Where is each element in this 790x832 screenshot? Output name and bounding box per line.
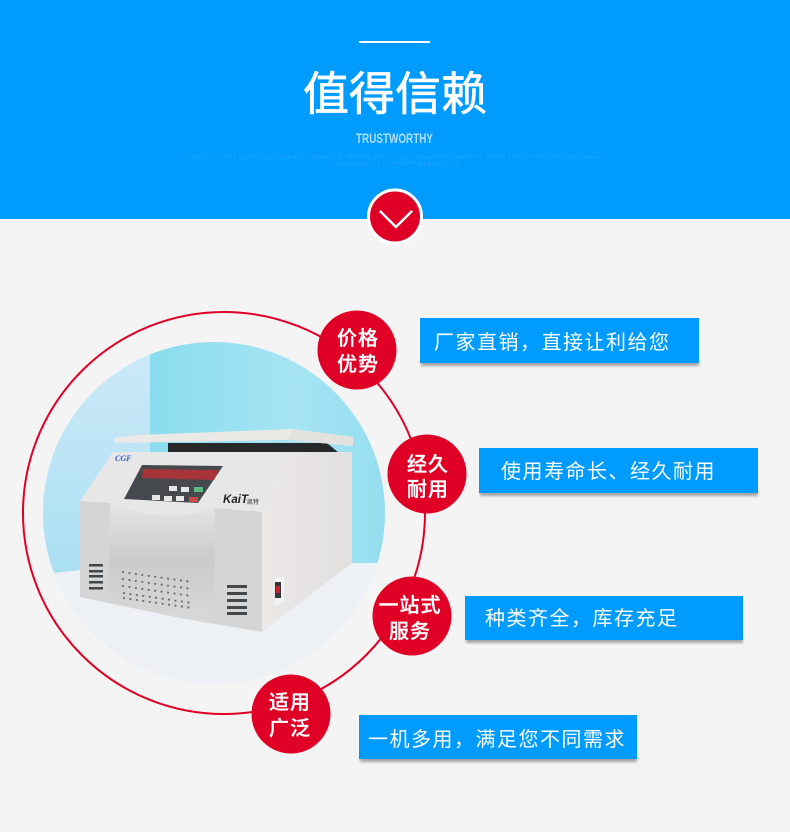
header band <box>0 0 790 219</box>
brand logo: KaiT <box>223 492 250 506</box>
badge: durable: 耐用 <box>407 478 449 501</box>
callout: price advantage: 厂家直销，直接让利给您 <box>434 331 670 354</box>
callout: durable <box>479 448 758 496</box>
product photo <box>43 342 385 632</box>
callout: wide application <box>359 715 637 762</box>
badge: durable <box>388 434 466 514</box>
machine side <box>262 452 352 632</box>
photo background <box>43 342 385 577</box>
subtitle: TRUSTWORTHY <box>356 130 433 146</box>
callout: wide application: 一机多用，满足您不同需求 <box>368 728 626 751</box>
machine lid gap <box>168 443 339 453</box>
badge: one-stop service: 服务 <box>389 620 431 643</box>
badge: price advantage: 优势 <box>337 353 379 376</box>
control panel <box>124 465 223 503</box>
badge: one-stop service <box>372 576 452 656</box>
badge: durable: 经久 <box>407 453 449 476</box>
callout: durable: 使用寿命长、经久耐用 <box>501 460 716 483</box>
badge: wide application: 适用 <box>269 691 311 714</box>
machine label CGF: CGF <box>115 454 132 463</box>
badge: price advantage <box>318 310 396 390</box>
brand logo <box>223 494 259 504</box>
icon: red chevron badge <box>368 190 422 243</box>
machine lid <box>114 429 353 446</box>
decorative small english text: MUSCLE BELLY IN HEALTH WEBESTIC SP <box>334 161 461 167</box>
right vent <box>227 585 247 615</box>
badge: one-stop service: 一站式 <box>378 594 442 617</box>
left vent <box>89 564 103 590</box>
machine top face <box>80 452 285 516</box>
decorative small english text <box>188 155 604 167</box>
callout: price advantage <box>420 318 699 366</box>
red ring connecting badges <box>23 312 425 714</box>
decorative small english text: BOARD SIT-UPS EXERCISE EQUIPMENT DOMESTIC SPORTS MULTI-FUNCTION ABDOMINALESTIC SPORTS MULTI-FUNCTION ABDOMINAL <box>188 155 604 161</box>
brand logo: 凯特 <box>247 498 259 506</box>
badge: wide application: 广泛 <box>269 717 311 740</box>
perforated grille <box>122 572 192 608</box>
badge: price advantage: 价格 <box>337 327 379 350</box>
callout: one-stop service: 种类齐全，库存充足 <box>485 607 678 630</box>
power switch <box>275 576 284 606</box>
machine front <box>108 503 258 632</box>
callout: one-stop service <box>465 596 743 643</box>
badge: wide application <box>252 674 330 754</box>
title: 值得信赖 <box>303 68 487 120</box>
centrifuge machine <box>80 429 353 632</box>
